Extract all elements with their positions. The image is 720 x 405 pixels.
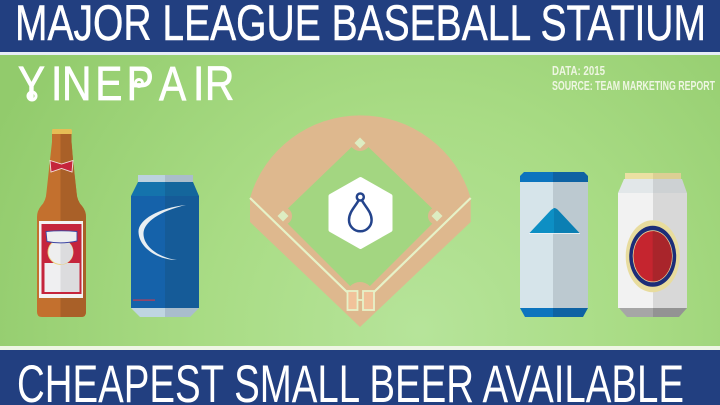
bases — [278, 138, 442, 222]
oval crest — [626, 220, 680, 292]
crescent logo — [138, 205, 186, 260]
icon: blue beer can — [131, 175, 199, 317]
mountain logo — [529, 208, 580, 234]
red stripe — [133, 300, 155, 301]
footer band — [0, 346, 720, 405]
logo: VinePair wordmark: YINEPAIR — [18, 58, 234, 111]
batter boxes — [348, 291, 374, 310]
pitcher badge: hexagon logo — [330, 179, 390, 247]
header band — [0, 0, 720, 55]
bottle label — [39, 221, 83, 298]
icon: white and gold beer can — [618, 173, 687, 317]
icon: light blue and white beer can — [520, 172, 588, 317]
infield grass — [280, 139, 440, 296]
infield dirt — [250, 115, 471, 327]
foul lines — [250, 198, 471, 292]
baseball diamond — [250, 115, 471, 327]
data source note: DATA: 2015 — [552, 64, 605, 78]
base dirt circles — [274, 129, 446, 310]
bow tie label — [50, 160, 73, 172]
icon: beer bottle — [37, 129, 86, 317]
data source note — [552, 64, 715, 93]
